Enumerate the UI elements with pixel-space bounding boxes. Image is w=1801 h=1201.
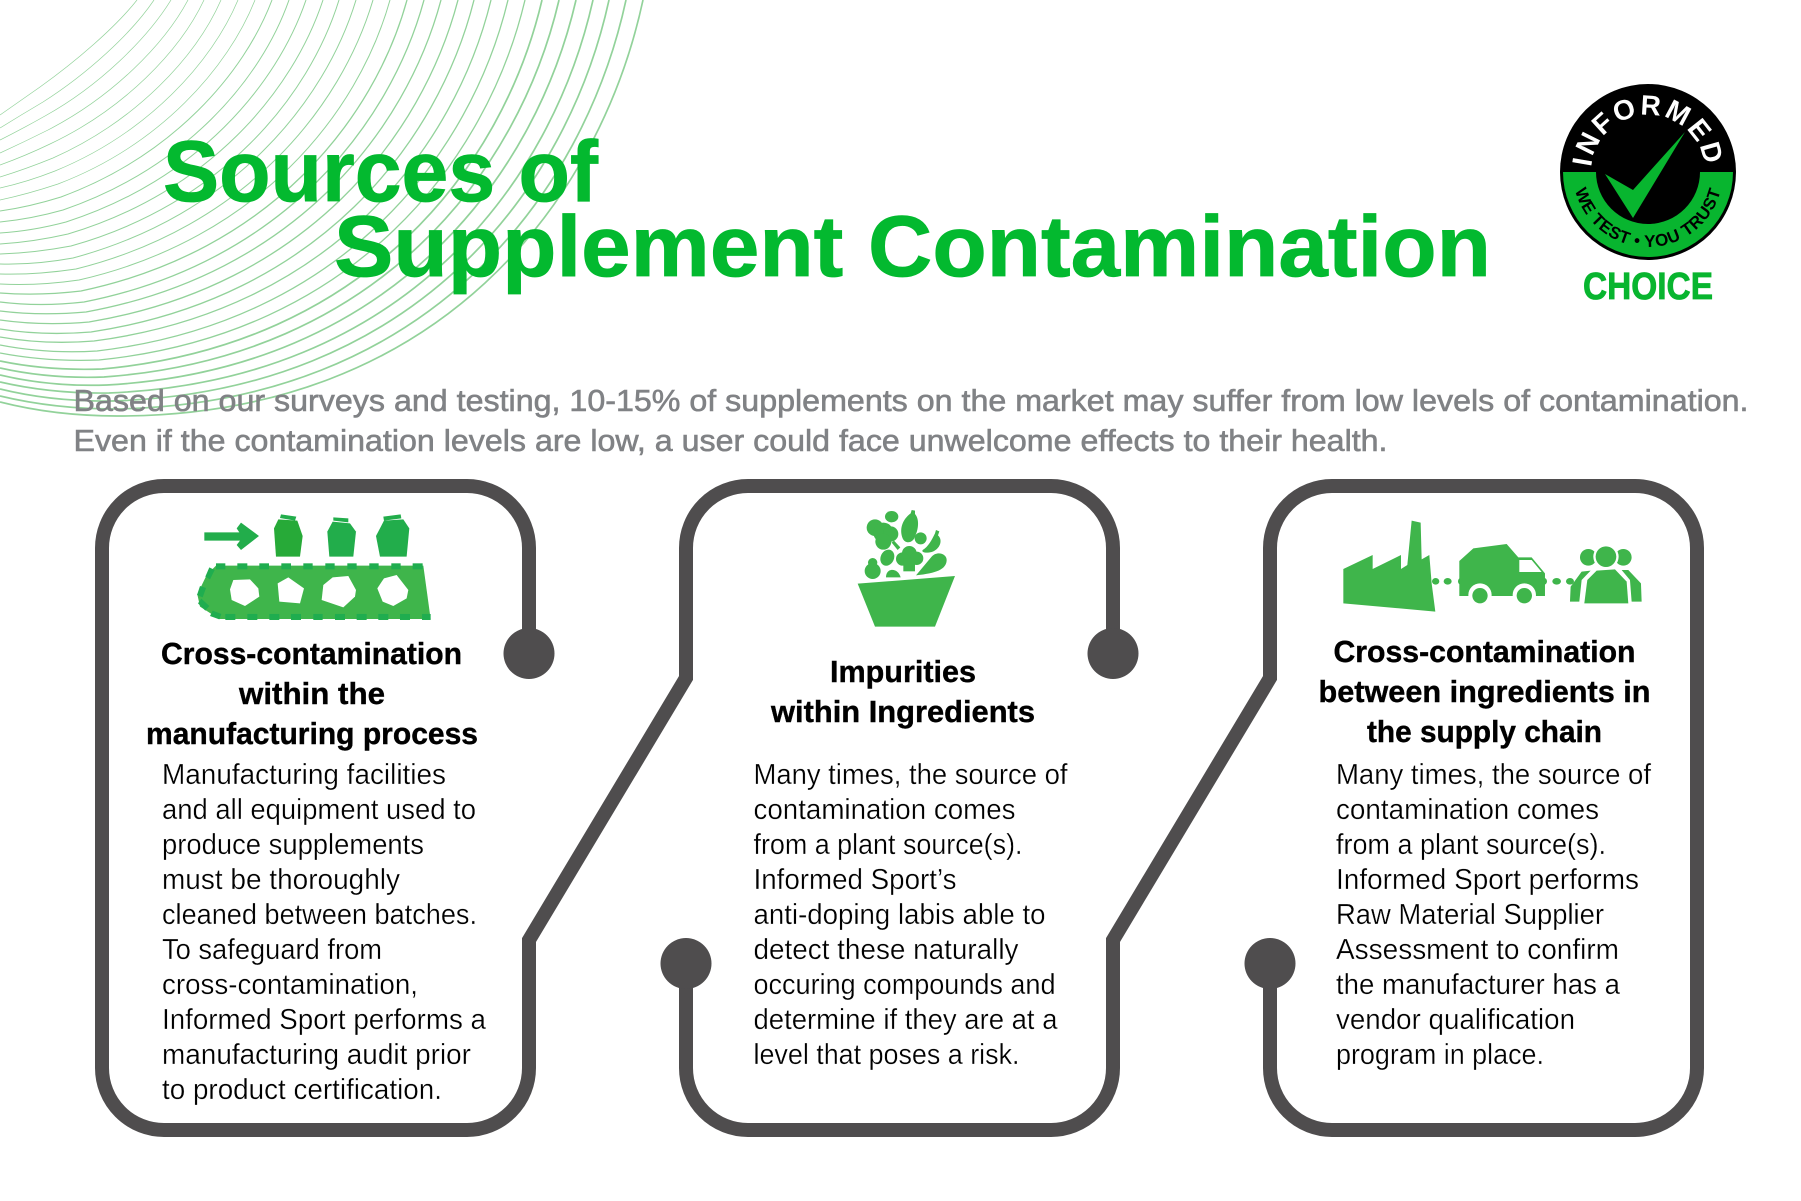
title: Sources of (163, 124, 598, 220)
card 1 body: cleaned between batches. (162, 899, 477, 931)
badge: Informed Choice (1560, 84, 1736, 308)
panel: card 1 text (146, 636, 487, 1106)
panel: card 2 text (754, 654, 1068, 1071)
card 1 body: to product certification. (162, 1074, 442, 1106)
card 2 body: determine if they are at a (754, 1004, 1058, 1036)
badge green band (1563, 172, 1733, 257)
link dots (1432, 578, 1439, 585)
intro text: Even if the contamination levels are low, a user could face unwelcome effects to their health. (74, 423, 1388, 458)
card 1 body: produce supplements (162, 829, 424, 861)
card 3 body: program in place. (1336, 1039, 1544, 1071)
card 3 heading: Cross-contamination (1334, 634, 1636, 669)
card 1 heading: manufacturing process (146, 716, 478, 751)
card 1 body: Manufacturing facilities (162, 759, 446, 791)
icon: supply chain (1343, 521, 1642, 612)
card 3 heading: the supply chain (1367, 714, 1602, 749)
belt body (197, 566, 431, 619)
intro text: Based on our surveys and testing, 10-15% of supplements on the market may suffer from low levels of contamination. (74, 383, 1749, 418)
card 1 body: Informed Sport performs a (162, 1004, 487, 1036)
card 2 frame (686, 486, 1697, 1130)
card 1 body: must be thoroughly (162, 864, 400, 896)
card 2 body: Many times, the source of (754, 759, 1068, 791)
decorative arcs (0, 0, 643, 416)
card 3 body (1336, 759, 1652, 1071)
badge label: CHOICE (1583, 266, 1713, 308)
panel: card frames and connectors (102, 486, 1697, 1130)
title (163, 124, 1491, 295)
badge wordmark: INFORMED (1572, 95, 1722, 166)
card 1 body: To safeguard from (162, 934, 382, 966)
card 1 heading: Cross-contamination (161, 636, 462, 671)
badge disc (1560, 84, 1736, 260)
intro text (74, 383, 1749, 458)
card 3 body: the manufacturer has a (1336, 969, 1621, 1001)
card 1 body: and all equipment used to (162, 794, 476, 826)
card 2 body: Informed Sport’s (754, 864, 956, 896)
people (1580, 549, 1597, 566)
badge tagline: WE TEST • YOU TRUST (1576, 186, 1720, 247)
card 2 body: level that poses a risk. (754, 1039, 1020, 1071)
belt holes (230, 575, 408, 607)
plants (865, 510, 947, 579)
card 1 body: manufacturing audit prior (162, 1039, 471, 1071)
card 2 heading (770, 654, 1035, 729)
card 2 heading: within Ingredients (770, 694, 1035, 729)
card 2 body (754, 759, 1068, 1071)
card 1 heading: within the (238, 676, 385, 711)
card 1 body (162, 759, 487, 1106)
arrow (204, 523, 259, 550)
badge inner disc (1596, 172, 1700, 224)
card 3 body: Many times, the source of (1336, 759, 1652, 791)
card 1 heading (146, 636, 478, 751)
card 3 body: contamination comes (1336, 794, 1599, 826)
truck (1459, 544, 1545, 596)
card 2 heading: Impurities (830, 654, 976, 689)
connector dots (504, 628, 1296, 989)
icon: bowl of plants (858, 510, 955, 627)
card 2 body: contamination comes (754, 794, 1016, 826)
bottles (274, 514, 409, 557)
card 2 body: from a plant source(s). (754, 829, 1022, 861)
icon: check mark (1605, 132, 1685, 218)
card 2 body: detect these naturally (754, 934, 1019, 966)
card 3 body: Informed Sport performs (1336, 864, 1639, 896)
title: Supplement Contamination (334, 199, 1491, 295)
belt dashes (197, 563, 431, 620)
card 1 frame (102, 486, 1113, 1130)
panel: card 3 text (1318, 634, 1652, 1071)
card 3 body: Raw Material Supplier (1336, 899, 1604, 931)
card 1 body: cross-contamination, (162, 969, 418, 1001)
card 3 body: Assessment to confirm (1336, 934, 1619, 966)
bowl (858, 576, 955, 627)
card 3 body: vendor qualification (1336, 1004, 1575, 1036)
link dots (1542, 578, 1547, 585)
card 3 heading (1318, 634, 1650, 749)
card 2 body: anti-doping labis able to (754, 899, 1046, 931)
card 2 body: occuring compounds and (754, 969, 1056, 1001)
icon: conveyor belt with bottles (197, 514, 431, 620)
card 3 heading: between ingredients in (1318, 674, 1650, 709)
card 3 body: from a plant source(s). (1336, 829, 1606, 861)
factory (1343, 521, 1435, 612)
